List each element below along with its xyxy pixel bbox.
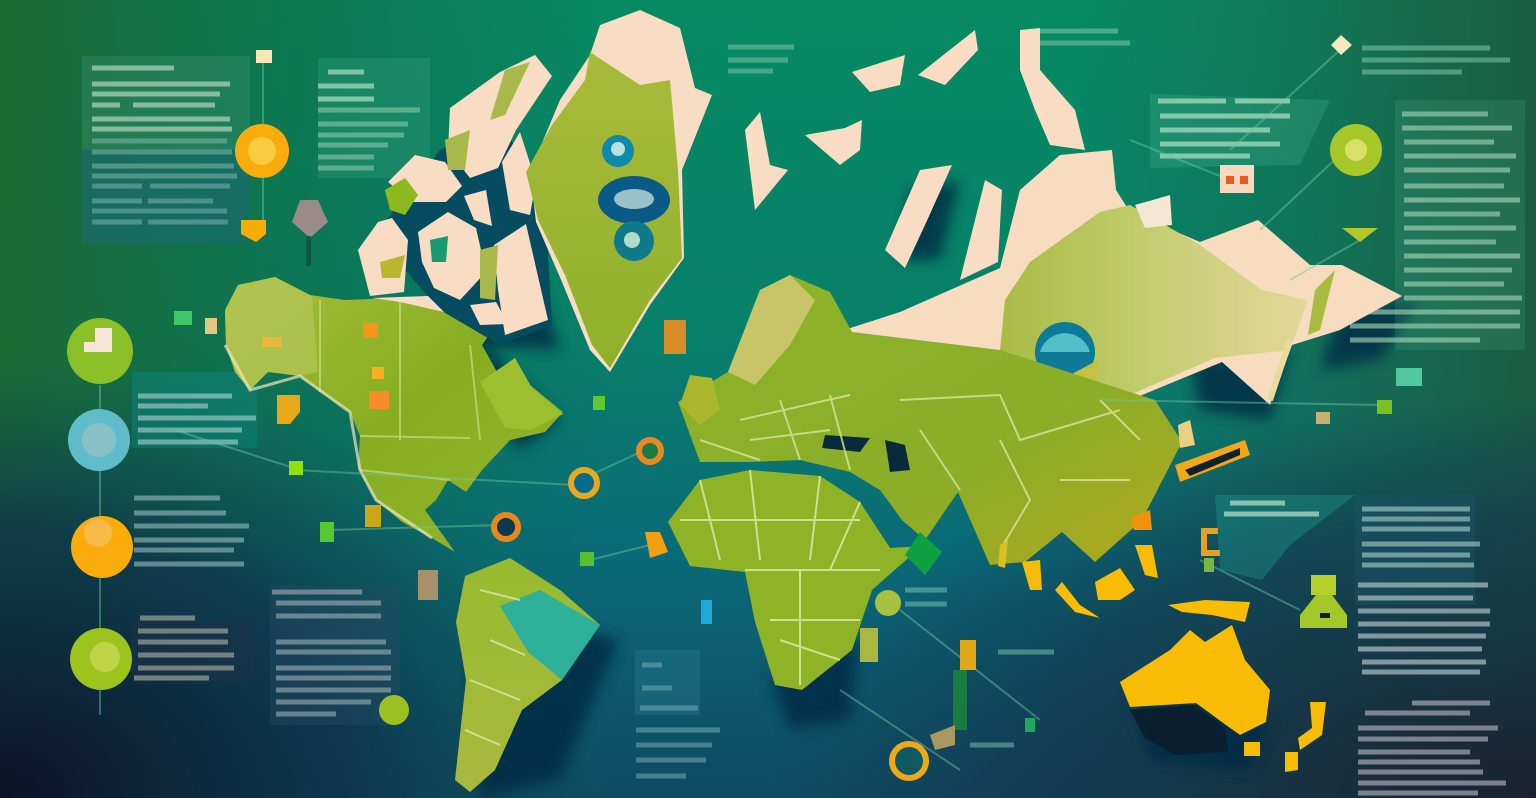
marker: lime (289, 461, 303, 475)
panel: central south text block (635, 650, 720, 776)
panel: left-side text 1 (132, 372, 257, 448)
marker: gold ring (892, 744, 926, 778)
marker: lime ball (875, 590, 901, 616)
russia and arctic islands (745, 28, 1402, 405)
marker: gold (365, 505, 381, 527)
icon: orange coin badge (71, 516, 133, 578)
ocean markers (174, 311, 1035, 778)
circle icons on russia and alaska coast (1035, 322, 1098, 385)
icon: tan marker (1316, 412, 1330, 424)
icon: small pin (256, 50, 272, 63)
icon: lime diamond (1342, 228, 1378, 242)
top-left icons (235, 50, 328, 266)
icon: person figure (1300, 575, 1347, 628)
marker: orange greenland (664, 320, 686, 354)
icon: mint marker (1396, 368, 1422, 386)
japan and east asia icon (1175, 340, 1290, 482)
marker: tan pin (418, 570, 438, 600)
marker: orange ring 2 (639, 440, 661, 462)
panel: south east callout (1215, 495, 1355, 580)
icon: blue globe badge (68, 409, 130, 471)
right icons (1204, 35, 1422, 628)
text: top centre labels (728, 31, 1130, 71)
timeline icons: left column (67, 318, 133, 690)
panel: lower-left text block (270, 585, 400, 725)
icon: gold marker (241, 220, 266, 242)
marker: tall figure (953, 640, 976, 730)
icon: lime leaf badge (70, 628, 132, 690)
arctic sea backdrop (375, 120, 552, 345)
panel: upper right callout (1150, 48, 1510, 168)
arctic island details (380, 62, 530, 300)
greenland (526, 10, 712, 372)
marker: green mini (1025, 718, 1035, 732)
marker: orange blue ring (571, 470, 597, 496)
panel: left-side text 2 (134, 498, 249, 564)
marker: tan diag (930, 725, 955, 750)
marker: green small (593, 396, 605, 410)
panel: right text column (1350, 100, 1525, 350)
panel: second top text block (318, 58, 430, 178)
marker: green square (174, 311, 192, 325)
dark shadow under australia (1130, 705, 1228, 755)
eurasia (678, 275, 1195, 565)
icon: orange ring (1204, 531, 1220, 553)
icons on greenland (598, 135, 670, 261)
icon: small star (1331, 35, 1352, 55)
marker: tan dot (205, 318, 217, 334)
marker: green (320, 522, 334, 542)
land shadows (400, 180, 1420, 798)
marker: north america orange pins (363, 323, 389, 409)
icon: green location badge (67, 318, 133, 384)
icon: red pin (1220, 165, 1254, 193)
north america (225, 277, 563, 552)
marker: orange (645, 532, 668, 558)
icon: gold coin (235, 124, 289, 178)
connector lines (100, 50, 1380, 770)
marker: small tan (860, 628, 878, 662)
icon: lime coin (1330, 124, 1382, 176)
icon: lime marker (1377, 400, 1392, 414)
panel: top-left text block (82, 56, 250, 244)
marker: orange ring atlantic (494, 515, 518, 539)
marker: green splash (905, 532, 942, 575)
icon: grey marker (292, 200, 328, 266)
canadian arctic islands (358, 55, 552, 335)
marker: yellow tag alaska (262, 337, 282, 347)
south america (455, 558, 600, 792)
text: indian ocean labels (905, 590, 1054, 745)
marker: gold coin pacific (277, 395, 300, 424)
marker: green small 2 (580, 552, 594, 566)
marker: lime pin (379, 695, 409, 725)
australia and oceania (998, 510, 1326, 772)
marker: blue (701, 600, 712, 624)
panel: left-side text 3 (132, 618, 254, 682)
panel: lower-right text column (1355, 495, 1506, 793)
africa (668, 470, 922, 690)
